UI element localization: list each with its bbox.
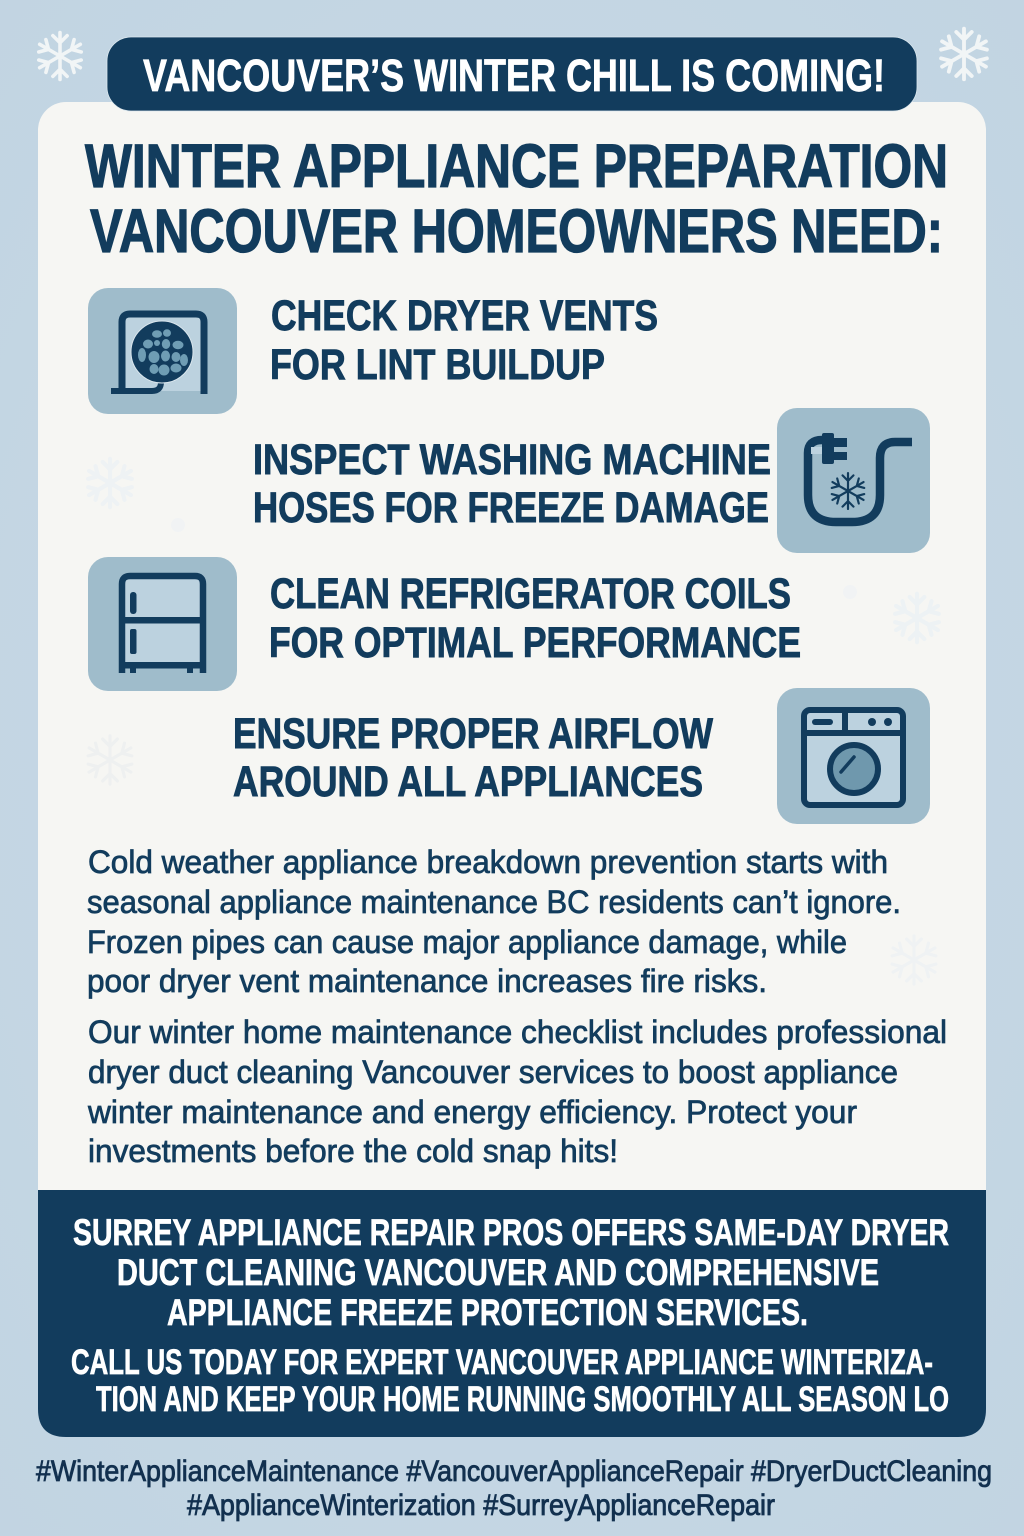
- body paragraph two: dryer duct cleaning Vancouver services to boost appliance: [88, 1054, 898, 1090]
- icon: washing machine: [777, 688, 930, 824]
- call to action: call us text: [71, 1343, 949, 1419]
- checklist item: refrigerator coils: FOR OPTIMAL PERFORMANCE: [269, 619, 801, 667]
- body paragraph two: winter maintenance and energy efficiency. Protect your: [87, 1094, 857, 1130]
- panel: call to action: [38, 1190, 986, 1437]
- title: [85, 132, 948, 265]
- decorative snowflake: left lower: [85, 736, 135, 784]
- body paragraph two: investments before the cold snap hits!: [88, 1133, 618, 1169]
- checklist item: washing machine hoses: HOSES FOR FREEZE DAMAGE: [253, 484, 769, 532]
- checklist item: refrigerator coils: [269, 570, 801, 667]
- checklist item: dryer vents: CHECK DRYER VENTS: [271, 292, 658, 340]
- checklist item: airflow: AROUND ALL APPLIANCES: [233, 758, 703, 806]
- checklist item: airflow: ENSURE PROPER AIRFLOW: [233, 710, 713, 758]
- checklist item: refrigerator coils: CLEAN REFRIGERATOR COILS: [270, 570, 791, 618]
- checklist item: dryer vents: [270, 292, 658, 389]
- decorative snowflake: right lower: [889, 936, 939, 984]
- decorative snowflake: right middle: [892, 594, 942, 642]
- body paragraph one: Cold weather appliance breakdown prevention starts with: [88, 844, 888, 880]
- panel: main white card: [38, 102, 986, 1302]
- call to action: services text: APPLIANCE FREEZE PROTECTION SERVICES.: [167, 1292, 808, 1333]
- call to action: services text: [73, 1212, 949, 1333]
- body paragraph one: Frozen pipes can cause major appliance damage, while: [87, 924, 847, 960]
- body paragraph one: seasonal appliance maintenance BC residents can’t ignore.: [87, 884, 901, 920]
- banner: winter chill: [107, 37, 917, 111]
- hashtags: #ApplianceWinterization #SurreyApplianceRepair: [187, 1489, 775, 1522]
- icon: snowflake top right: [938, 29, 990, 79]
- icon: snowflake top left: [36, 33, 84, 79]
- checklist item: dryer vents: FOR LINT BUILDUP: [270, 341, 605, 389]
- body paragraph two: Our winter home maintenance checklist includes professional: [88, 1014, 947, 1050]
- checklist item: washing machine hoses: INSPECT WASHING MACHINE: [253, 436, 771, 484]
- body paragraph one: [87, 844, 901, 999]
- icon: frozen hose: [777, 408, 930, 553]
- checklist item: airflow: [233, 710, 713, 806]
- decorative snow dots: [136, 518, 857, 619]
- body paragraph one: poor dryer vent maintenance increases fire risks.: [87, 963, 767, 999]
- icon: refrigerator: [88, 557, 237, 691]
- checklist item: washing machine hoses: [253, 436, 771, 532]
- hashtags: [36, 1455, 992, 1522]
- icon: dryer vent: [88, 288, 237, 414]
- body paragraph two: [87, 1014, 947, 1169]
- decorative snowflake: left upper: [85, 459, 135, 507]
